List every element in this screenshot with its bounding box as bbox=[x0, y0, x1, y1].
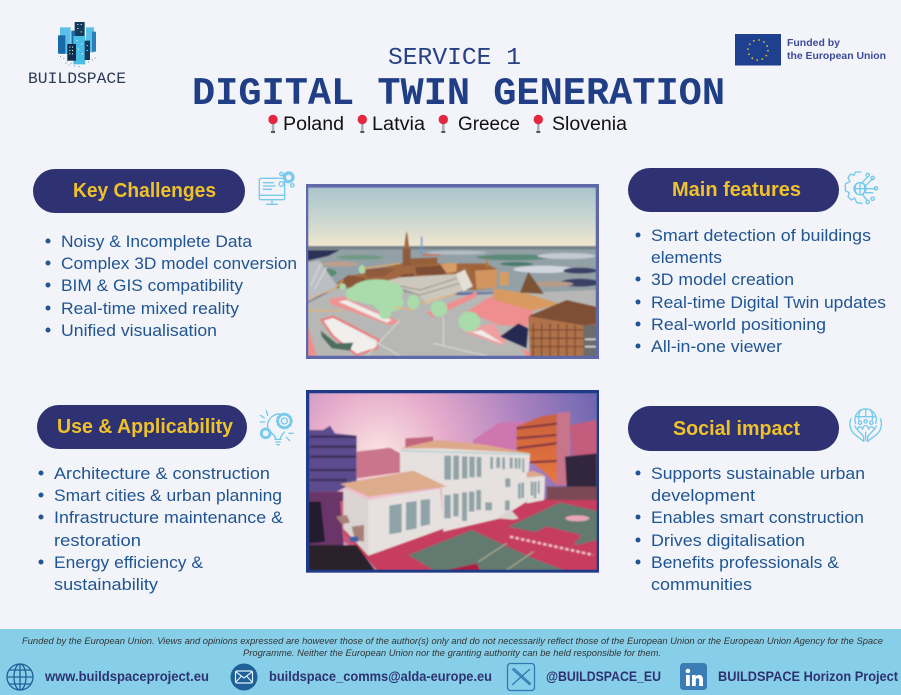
panel: key challenges bbox=[33, 169, 297, 340]
locations row: Greece bbox=[458, 114, 520, 135]
heading pill: Key Challenges bbox=[33, 169, 245, 213]
heading pill: Use & Applicability bbox=[37, 405, 247, 449]
list: challenges bbox=[46, 232, 297, 340]
footer bbox=[0, 629, 901, 695]
logo: BUILDSPACE bbox=[28, 22, 126, 88]
list: challenges: Real-time mixed reality bbox=[61, 299, 240, 318]
pin: Slovenia bbox=[534, 115, 543, 133]
website: www.buildspaceproject.eu bbox=[44, 669, 209, 684]
icon: monitor with gears bbox=[259, 172, 294, 204]
heading pill: Use & Applicability: Use & Applicability bbox=[57, 416, 234, 438]
heading pill: Main features: Main features bbox=[672, 179, 801, 201]
list: impact: Drives digitalisation bbox=[651, 531, 805, 550]
list: applicability: Architecture & construction bbox=[54, 464, 270, 483]
list: features: Smart detection of buildings bbox=[651, 226, 871, 245]
icon: hands holding globe and people bbox=[850, 409, 881, 441]
heading pill: Social impact: Social impact bbox=[673, 418, 800, 440]
list: features: 3D model creation bbox=[651, 270, 794, 289]
list: applicability: restoration bbox=[54, 531, 141, 550]
list: applicability: Smart cities & urban planning bbox=[54, 486, 282, 505]
email: buildspace_comms@alda-europe.eu bbox=[269, 669, 492, 684]
icon: gear with network bbox=[845, 172, 878, 204]
list: features: Real-world positioning bbox=[651, 315, 826, 334]
icon: mail bbox=[230, 664, 258, 690]
disclaimer: Funded by the European Union. Views and opinions expressed are however those of the author(s) only and do not necessarily reflect those of the European Union or the European Union Agency for the Space bbox=[22, 636, 883, 647]
pin: Latvia bbox=[358, 115, 367, 133]
locations row: Slovenia bbox=[552, 114, 627, 135]
main title: DIGITAL TWIN GENERATION bbox=[192, 72, 725, 116]
disclaimer: Programme. Neither the European Union nor the granting authority can be held responsible for them. bbox=[243, 648, 661, 659]
list: impact bbox=[636, 464, 865, 594]
image: reconstructed school building bbox=[306, 390, 599, 573]
header: service title bbox=[192, 45, 725, 116]
X handle: @BUILDSPACE_EU bbox=[546, 669, 661, 684]
EU flag bbox=[735, 34, 781, 66]
logo wordmark: BUILDSPACE bbox=[28, 70, 126, 88]
EU funding emblem: the European Union bbox=[787, 51, 886, 62]
list: challenges: Complex 3D model conversion bbox=[61, 254, 297, 273]
heading pill: Social impact bbox=[628, 406, 839, 451]
panel: social impact bbox=[628, 406, 881, 594]
list: features bbox=[636, 226, 886, 356]
list: applicability: Energy efficiency & bbox=[54, 553, 204, 572]
list: challenges: Unified visualisation bbox=[61, 321, 217, 340]
list: applicability: Infrastructure maintenance & bbox=[54, 508, 284, 527]
list: impact: development bbox=[651, 486, 755, 505]
icon: globe bbox=[7, 664, 33, 690]
pin: Greece bbox=[439, 115, 448, 133]
list: impact: Benefits professionals & bbox=[651, 553, 840, 572]
list: impact: communities bbox=[651, 575, 752, 594]
locations row: Poland bbox=[283, 114, 344, 135]
list: features: Real-time Digital Twin updates bbox=[651, 293, 886, 312]
list: impact: Supports sustainable urban bbox=[651, 464, 865, 483]
heading pill: Key Challenges: Key Challenges bbox=[73, 180, 216, 202]
list: impact: Enables smart construction bbox=[651, 508, 864, 527]
list: features: elements bbox=[651, 248, 722, 267]
list: features: All-in-one viewer bbox=[651, 337, 782, 356]
service number: SERVICE 1 bbox=[388, 45, 521, 72]
pin: Poland bbox=[268, 115, 278, 133]
icon: LinkedIn bbox=[680, 663, 707, 690]
locations row bbox=[268, 114, 627, 135]
heading pill: Main features bbox=[628, 168, 839, 212]
list: applicability bbox=[38, 464, 284, 594]
list: challenges: Noisy & Incomplete Data bbox=[61, 232, 253, 251]
panel: main features bbox=[628, 168, 886, 356]
icon: light bulb with gears bbox=[260, 411, 293, 445]
locations row: Latvia bbox=[372, 114, 425, 135]
EU funding emblem bbox=[735, 34, 886, 66]
panel: use and applicability bbox=[37, 405, 293, 594]
image: city digital twin model bbox=[306, 184, 600, 359]
list: applicability: sustainability bbox=[54, 575, 159, 594]
icon: X bbox=[508, 664, 534, 690]
list: challenges: BIM & GIS compatibility bbox=[61, 276, 243, 295]
EU funding emblem: Funded by bbox=[787, 38, 840, 49]
disclaimer bbox=[22, 636, 883, 659]
